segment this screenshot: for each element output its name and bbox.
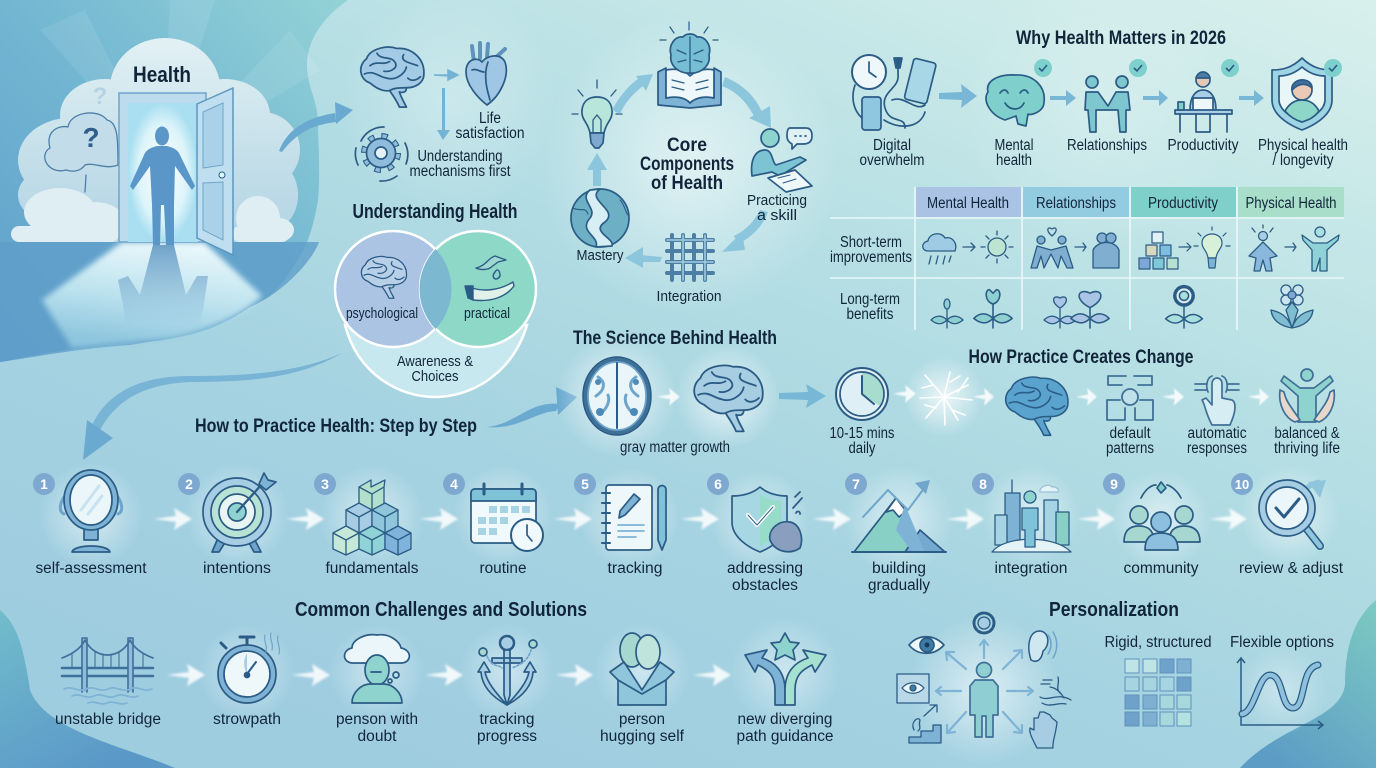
label: understanding mechanisms first: Understanding: [418, 148, 502, 165]
icon: person practicing skill: [752, 128, 812, 192]
label: automatic responses: [1187, 425, 1247, 457]
header: relationships: Relationships: [1036, 195, 1116, 212]
icon: person with doubt: [344, 635, 409, 703]
icon: neuron: [904, 357, 984, 437]
icon: brain scan: [557, 336, 677, 456]
label: digital overwhelm: overwhelm: [860, 152, 924, 169]
light rays: [40, 0, 320, 165]
arrow: [973, 388, 994, 406]
panel: common challenges and solutions: [55, 599, 840, 745]
icon: framed eye: [897, 674, 929, 703]
icon: notebook and pen: [602, 485, 666, 550]
icon: conflict to hug: [1031, 228, 1119, 268]
door opening: [128, 103, 198, 242]
icon: woven lattice: [667, 235, 713, 280]
label: life satisfaction: satisfaction: [456, 125, 524, 142]
row label: short-term: [830, 234, 912, 266]
panel: core components cycle: [571, 22, 812, 305]
label: understanding mechanisms first: mechanisms first: [410, 163, 511, 180]
icon: big flower: [1271, 285, 1313, 328]
arrow: [1076, 388, 1097, 406]
arrow: long curve to step by step: [83, 353, 342, 460]
label: understanding mechanisms first: [410, 148, 511, 180]
label: balanced and thriving: [1274, 425, 1340, 457]
label: intentions: intentions: [203, 560, 271, 577]
label: rigid structured: Rigid, structured: [1104, 634, 1212, 651]
icon: large heart plant: [1071, 292, 1109, 328]
challenge arrows: [167, 664, 731, 686]
badge: productivity check: [1221, 59, 1239, 77]
arrow: [1162, 388, 1184, 406]
label: relationships: Relationships: [1067, 137, 1147, 154]
heading: Understanding Health: [352, 201, 518, 223]
icon: rain to sun: [923, 231, 1013, 264]
venn: overlap: [419, 249, 452, 329]
label: building gradually: [868, 560, 930, 594]
icon: shield and rock: [732, 487, 802, 552]
question marks: [82, 83, 107, 153]
step 1: badge: 1: [40, 476, 48, 492]
label: balanced and thriving: thriving life: [1274, 440, 1340, 457]
icon: bridge: [62, 638, 153, 704]
label: life satisfaction: Life: [479, 110, 501, 127]
step 1: badge: [33, 473, 55, 495]
panel: benefits table: [830, 187, 1344, 330]
person silhouette: [130, 126, 195, 245]
label: mental health: [994, 137, 1034, 169]
row label: long-term: benefits: [846, 306, 894, 323]
venn: psychological circle: [335, 231, 451, 347]
icon: handshake: [1085, 76, 1130, 132]
heading: core components of health: Core: [667, 135, 707, 156]
corner blob: bottom left: [0, 610, 175, 768]
label: tracking: tracking: [608, 560, 662, 577]
label: person with doubt: penson with: [336, 711, 418, 728]
icon: lightbulb: [572, 80, 622, 148]
badge: mental health check: [1034, 59, 1052, 77]
label: unstable bridge: unstable bridge: [55, 711, 161, 728]
label: community: community: [1124, 560, 1199, 577]
icon: small brain: [361, 256, 407, 298]
step 7: badge: [845, 473, 867, 495]
icon: anchor: [478, 636, 537, 705]
panel: brain to life satisfaction: [355, 43, 524, 181]
open door: [197, 88, 233, 255]
panel: ten steps: [33, 463, 1344, 594]
icon: river globe: [571, 189, 629, 247]
icon: gear flower: [1166, 287, 1202, 328]
floor shade: [0, 242, 319, 362]
label: mental health: Mental: [994, 137, 1034, 154]
step 8: badge: [972, 473, 994, 495]
icon: diverging path: [745, 633, 826, 705]
label: default patterns: default: [1110, 425, 1151, 442]
label: practicing a skill: a skill: [757, 207, 797, 224]
arrow: digital to mental: [939, 84, 977, 108]
icon: stopwatch: [218, 633, 279, 703]
title: Health: Health: [133, 62, 191, 87]
icon: clock: [836, 368, 888, 420]
label: addressing obstacles: obstacles: [732, 577, 798, 594]
label: new diverging path guidance: new diverging: [738, 711, 832, 728]
challenge glows: [199, 617, 840, 727]
soft background glows: [340, 0, 1240, 315]
icon: tulip: [974, 290, 1012, 328]
glow behind person: [909, 615, 1059, 765]
label: physical health longevity: Physical health: [1258, 137, 1348, 154]
label: awareness and choices: [397, 353, 473, 385]
heading: The Science Behind Health: [573, 328, 777, 349]
icon: ear: [1029, 631, 1057, 661]
icon: tired to energized figure: [1249, 225, 1339, 271]
label: psychological: psychological: [346, 305, 418, 322]
panel: why health matters: [852, 28, 1348, 169]
step 5: badge: [574, 473, 596, 495]
arrow: mental to relationships: [1050, 90, 1076, 106]
step 7: badge: 7: [852, 476, 860, 492]
label: addressing obstacles: addressing: [727, 560, 803, 577]
label: tracking progress: [477, 711, 537, 745]
icon: community: [1124, 482, 1200, 550]
arrow: [893, 385, 916, 403]
icon: calendar and clock: [471, 484, 543, 551]
label: 10-15 mins daily: 10-15 mins: [830, 425, 895, 442]
corner blob: bottom right: [1240, 600, 1376, 768]
icon: central person: [970, 662, 998, 737]
icon: small heart plant: [1044, 297, 1076, 328]
label: default patterns: [1106, 425, 1154, 457]
heading: Common Challenges and Solutions: [295, 599, 587, 621]
step 3: badge: 3: [321, 476, 329, 492]
step 3: badge: [314, 473, 336, 495]
venn: awareness circle: [345, 325, 527, 397]
header: mental health: Mental Health: [927, 195, 1009, 212]
step 9: badge: [1103, 473, 1125, 495]
label: practical: practical: [464, 305, 510, 322]
header: physical health: Physical Health: [1246, 195, 1336, 212]
step 2: badge: [178, 473, 200, 495]
label: strowpath: strowpath: [213, 711, 281, 728]
icon: swimmer: [1040, 677, 1071, 705]
step 6: badge: 6: [714, 476, 722, 492]
label: new diverging path guidance: path guidance: [736, 728, 834, 745]
step 10: badge: 10: [1235, 477, 1249, 492]
label: person hugging self: [600, 711, 685, 745]
label: person with doubt: doubt: [358, 728, 397, 745]
icon: smiling brain: [986, 75, 1044, 126]
heading: Why Health Matters in 2026: [1016, 28, 1226, 49]
chart: flexible curve: [1237, 645, 1327, 735]
label: addressing obstacles: [727, 560, 803, 594]
icon: cube pyramid: [333, 480, 411, 555]
heading: core components of health: Components: [640, 154, 734, 175]
step glows: [39, 463, 1340, 575]
shadow: [118, 245, 208, 333]
grid: rigid structured: [1125, 659, 1191, 726]
heading: how to practice: How to Practice Health: Step by Step: [195, 415, 477, 437]
icon: eye: [909, 637, 944, 653]
icon: brain: [361, 47, 424, 107]
row label: long-term: Long-term: [840, 291, 900, 308]
door frame: [119, 93, 206, 242]
clouds: [18, 38, 300, 242]
panel: hero door scene: [0, 0, 353, 362]
cycle arrows: [587, 74, 771, 268]
panel: science behind health: [195, 328, 826, 456]
question marks: ?: [93, 83, 107, 110]
label: building gradually: gradually: [868, 577, 930, 594]
arrow: step heading to science: [486, 387, 577, 427]
row label: short-term: improvements: [830, 249, 912, 266]
step 8: badge: 8: [979, 476, 987, 492]
step 4: badge: [443, 473, 465, 495]
heading: Personalization: [1049, 599, 1179, 621]
label: 10-15 mins daily: daily: [848, 440, 876, 457]
arrow: brain to clock: [779, 384, 826, 408]
step 5: badge: 5: [581, 476, 589, 492]
label: mastery: Mastery: [576, 247, 624, 264]
table header cells: [916, 187, 1344, 217]
heading: core components of health: [640, 135, 734, 194]
label: automatic responses: automatic: [1188, 425, 1247, 442]
label: fundamentals: fundamentals: [326, 560, 419, 577]
icon: digital overwhelm devices: [852, 55, 936, 130]
icon: sprout: [931, 299, 963, 328]
heading: core components of health: of Health: [651, 173, 723, 194]
label: awareness and choices: Awareness &: [397, 353, 473, 370]
icon: person hugging self: [610, 633, 674, 705]
label: life satisfaction: [456, 110, 524, 142]
label: person hugging self: hugging self: [600, 728, 685, 745]
label: productivity: Productivity: [1168, 137, 1239, 154]
icon: person at desk: [1175, 72, 1232, 132]
icon: magnifier with trend: [1259, 480, 1326, 546]
label: routine: routine: [480, 560, 526, 577]
icon: blocks to bulb: [1139, 227, 1230, 269]
row label: short-term: Short-term: [840, 234, 902, 251]
arrow: scan to brain: [657, 388, 680, 406]
label: physical health longevity: / longevity: [1272, 152, 1334, 169]
label: mental health: health: [996, 152, 1032, 169]
label: awareness and choices: Choices: [412, 368, 458, 385]
hero blob: [0, 0, 348, 362]
label: person with doubt: [336, 711, 418, 745]
badge: relationships check: [1129, 59, 1147, 77]
arrow: productivity to physical: [1239, 90, 1264, 106]
label: practicing a skill: Practicing: [747, 192, 807, 209]
step 2: badge: 2: [185, 476, 193, 492]
icon: glowing brain: [675, 345, 779, 449]
step arrows: [154, 508, 1247, 530]
label: building gradually: building: [872, 560, 926, 577]
icon: pointing finger: [1195, 376, 1239, 425]
label: digital overwhelm: [860, 137, 924, 169]
arrow: [1248, 388, 1269, 406]
label: flexible options: Flexible options: [1230, 634, 1334, 651]
arrow: relationships to productivity: [1143, 90, 1168, 106]
icon: stairs and climber: [909, 705, 941, 743]
panel: how practice creates change: [830, 347, 1340, 457]
label: integration: Integration: [656, 288, 722, 305]
panel: personalization: [897, 599, 1334, 765]
header: productivity: Productivity: [1148, 195, 1218, 212]
icon: gear with cycle arrows: [355, 127, 408, 181]
icon: shield with person: [1272, 58, 1332, 130]
row label: long-term: [840, 291, 900, 323]
label: tracking progress: progress: [477, 728, 537, 745]
arrow: down: [437, 88, 450, 140]
light beam: [42, 242, 262, 348]
icon: default patterns: [1107, 376, 1153, 420]
label: gray matter growth: gray matter growth: [620, 439, 730, 456]
icon: small gear: [974, 613, 994, 633]
icon: hand and drop: [465, 256, 514, 300]
label: automatic responses: responses: [1187, 440, 1247, 457]
label: balanced and thriving: balanced &: [1274, 425, 1340, 442]
label: tracking progress: tracking: [480, 711, 534, 728]
label: practicing a skill: [747, 192, 807, 224]
label: physical health longevity: [1258, 137, 1348, 169]
icon: city and person: [992, 480, 1071, 552]
label: review and adjust: review & adjust: [1239, 560, 1344, 577]
radial arrows: [936, 640, 1033, 733]
arrow: out of the door: [279, 102, 353, 152]
step 4: badge: 4: [450, 476, 458, 492]
icon: heart: [466, 43, 506, 105]
label: person hugging self: person: [619, 711, 665, 728]
badge: physical health check: [1324, 59, 1342, 77]
thought cloud: [45, 113, 118, 192]
question marks: ?: [82, 122, 100, 153]
label: default patterns: patterns: [1106, 440, 1154, 457]
table grid lines: [830, 187, 1344, 330]
label: 10-15 mins daily: [830, 425, 895, 457]
icon: target: [203, 473, 276, 552]
icon: hand: [1030, 712, 1057, 748]
icon: mirror: [60, 470, 122, 552]
arrow: brain to heart: [434, 70, 458, 80]
panel: understanding health venn: [335, 201, 536, 397]
label: self-assessment: self-assessment: [36, 560, 147, 577]
icon: book and brain: [658, 22, 721, 108]
icon: thriving figure in hands: [1280, 369, 1334, 422]
icon: mountains and trend: [852, 480, 946, 552]
step 9: badge: 9: [1110, 476, 1118, 492]
step 6: badge: [707, 473, 729, 495]
label: integration: integration: [994, 560, 1068, 577]
label: digital overwhelm: Digital: [873, 137, 911, 154]
venn: practical circle: [420, 231, 536, 347]
step 10: badge: [1231, 473, 1253, 495]
icon: detailed brain: [1006, 377, 1068, 435]
heading: How Practice Creates Change: [968, 347, 1194, 368]
label: new diverging path guidance: [736, 711, 834, 745]
